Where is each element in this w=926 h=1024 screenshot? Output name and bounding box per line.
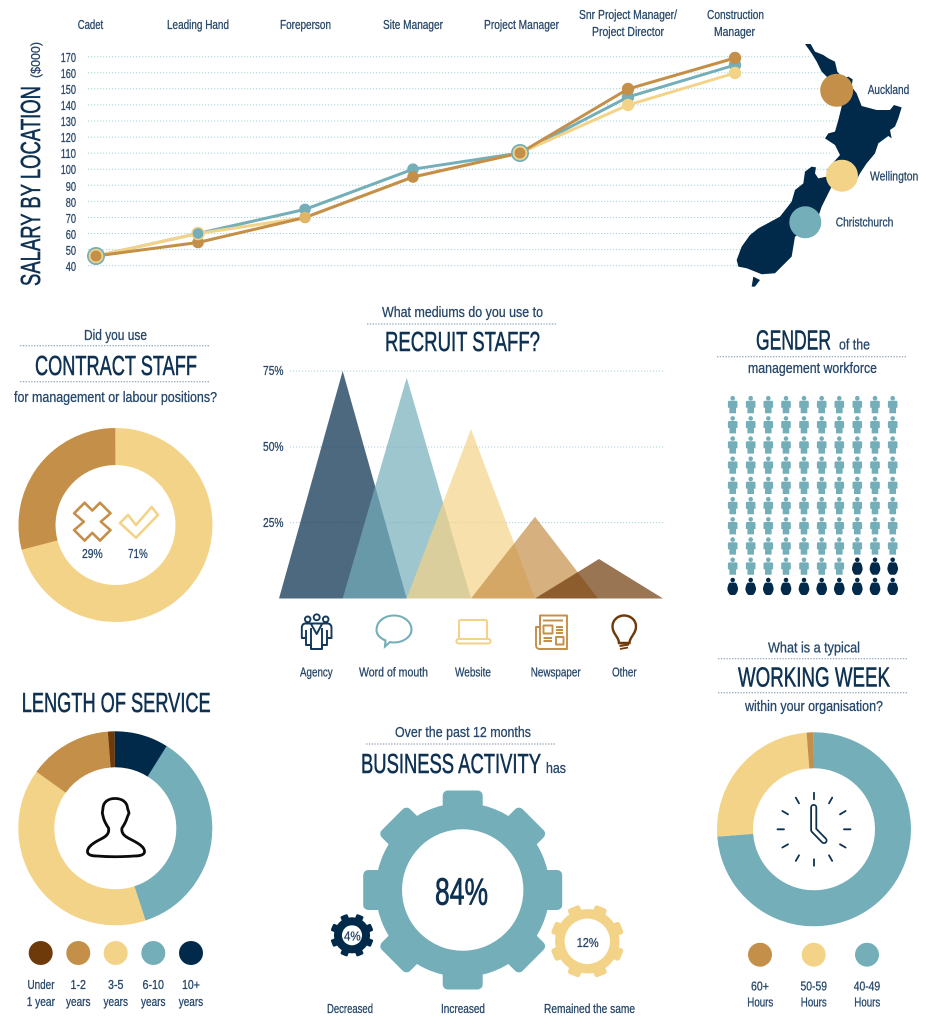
map: New Zealand locations	[737, 44, 918, 287]
panel: salary by location chart	[15, 8, 845, 286]
axis labels: 25%	[263, 516, 284, 530]
heading: business activity	[361, 724, 566, 779]
job role labels: Cadet	[78, 18, 104, 32]
heading: contract staff: for management or labour positions?	[14, 389, 217, 406]
icon: word of mouth speech bubble	[376, 616, 412, 646]
heading: contract staff: CONTRACT STAFF	[35, 350, 197, 381]
panel: working week	[718, 640, 908, 1010]
line: Wellington salaries	[96, 67, 741, 256]
value: 4%: 4%	[344, 930, 361, 944]
y axis values: 140	[61, 99, 76, 113]
icon labels: Agency	[300, 666, 333, 680]
heading: length of service: LENGTH OF SERVICE	[22, 687, 211, 718]
legend: working week hours: 50-59	[800, 980, 827, 994]
chart title: salary by location: ($000)	[29, 42, 43, 78]
heading: gender: GENDER	[756, 324, 831, 355]
heading: working week: within your organisation?	[744, 698, 883, 715]
label: Auckland: Auckland	[868, 83, 909, 97]
icon: website laptop	[456, 620, 490, 644]
line: Auckland salaries	[96, 52, 741, 256]
value: 71%: 71%	[128, 547, 148, 561]
legend: length of service: 3-5	[108, 978, 124, 992]
job role labels: Leading Hand	[167, 18, 229, 32]
gear: increased 84%	[363, 790, 562, 990]
legend: length of service	[27, 941, 203, 1009]
heading: business activity: has	[546, 760, 566, 777]
triangle chart: recruitment mediums	[279, 371, 663, 598]
value: 29%: 29%	[82, 547, 103, 561]
location marker: Christchurch	[789, 206, 821, 238]
legend: length of service: 1 year	[27, 995, 55, 1009]
y axis values: 110	[61, 147, 76, 161]
panel: business activity	[324, 724, 636, 1016]
job role labels: Snr Project Manager/	[579, 8, 677, 22]
heading: gender: management workforce	[748, 360, 877, 377]
pictogram: female figures	[727, 558, 898, 595]
legend: length of service: years	[66, 995, 90, 1009]
legend: working week hours: Hours	[801, 996, 827, 1010]
value: 84%: 84%	[435, 871, 488, 913]
legend: working week hours: 60+	[751, 980, 769, 994]
donut chart: length of service	[36, 749, 194, 907]
legend: length of service: 10+	[182, 978, 200, 992]
icon: person silhouette	[87, 798, 145, 857]
icon labels: Word of mouth	[359, 666, 428, 680]
legend: length of service: years	[141, 995, 166, 1009]
heading: recruit staff: What mediums do you use to	[382, 304, 543, 321]
gear labels: Decreased	[327, 1002, 373, 1016]
y axis values: 120	[61, 131, 76, 145]
heading: contract staff: Did you use	[84, 327, 147, 344]
heading: business activity: BUSINESS ACTIVITY	[361, 748, 541, 779]
heading: recruit staff	[367, 304, 557, 357]
icon: cross	[74, 503, 110, 541]
map silhouette	[737, 44, 902, 287]
panel: length of service	[22, 687, 211, 1009]
icon: agency	[302, 614, 332, 649]
icon: other light bulb	[612, 616, 636, 649]
legend: length of service: Under	[28, 978, 54, 992]
y axis values: 60	[66, 228, 76, 242]
icon labels: Other	[612, 666, 637, 680]
gear labels: Increased	[441, 1002, 485, 1016]
label: Christchurch: Christchurch	[836, 216, 893, 230]
heading: contract staff	[14, 327, 217, 406]
donut chart: contract staff	[20, 429, 211, 621]
shared data points	[87, 144, 529, 265]
heading: gender: of the	[839, 336, 870, 353]
legend: length of service: years	[104, 995, 128, 1009]
y axis values: 160	[61, 67, 76, 81]
y axis values: 130	[61, 115, 76, 129]
y axis values: 170	[61, 51, 76, 65]
donut chart: working week	[735, 750, 893, 908]
value: 12%: 12%	[577, 936, 599, 950]
legend: length of service: 1-2	[70, 978, 86, 992]
job role labels: Site Manager	[383, 18, 443, 32]
icon: clock	[778, 793, 850, 866]
pictogram: male figures	[728, 396, 898, 575]
gear: decreased 4%	[324, 907, 380, 964]
y axis values: 150	[61, 83, 76, 97]
icon: tick	[120, 507, 158, 538]
panel: gender of the management workforce	[717, 324, 907, 595]
legend: working week hours: Hours	[854, 996, 880, 1010]
panel: recruit staff	[263, 304, 664, 680]
axis labels: 50%	[263, 440, 284, 454]
gear labels: Remained the same	[544, 1002, 635, 1016]
gear: remained the same 12%	[539, 893, 636, 990]
y axis values: 50	[66, 244, 76, 258]
y axis values: 70	[66, 212, 76, 226]
panel: contract staff	[14, 327, 217, 621]
y axis values	[61, 51, 76, 274]
job role labels: Project Manager	[484, 18, 559, 32]
gear labels	[327, 1002, 635, 1016]
y axis values: 100	[61, 163, 76, 177]
heading: working week	[718, 640, 908, 715]
legend: length of service: years	[179, 995, 203, 1009]
location marker: Auckland	[820, 74, 853, 107]
job role labels: Foreperson	[280, 18, 331, 32]
line: Christchurch salaries	[96, 59, 741, 256]
axis labels	[263, 364, 284, 530]
legend: working week hours	[747, 943, 880, 1010]
icon: newspaper	[536, 616, 567, 649]
legend: working week hours: 40-49	[854, 980, 880, 994]
icon labels: Newspaper	[531, 666, 581, 680]
job role labels	[78, 8, 764, 39]
y axis values: 90	[66, 180, 76, 194]
heading: recruit staff: RECRUIT STAFF?	[385, 326, 540, 357]
location marker: Wellington	[826, 160, 858, 192]
y axis values: 80	[66, 196, 76, 210]
job role labels: Project Director	[592, 25, 664, 39]
legend: working week hours: Hours	[747, 996, 773, 1010]
icon labels	[300, 666, 637, 680]
job role labels: Construction	[707, 8, 764, 22]
icon labels: Website	[455, 666, 491, 680]
heading: working week: What is a typical	[768, 640, 860, 657]
axis labels: 75%	[263, 364, 284, 378]
legend: length of service: 6-10	[142, 978, 164, 992]
heading: business activity: Over the past 12 months	[395, 724, 531, 741]
y axis values: 40	[66, 260, 76, 274]
job role labels: Manager	[714, 25, 755, 39]
heading: gender	[717, 324, 907, 377]
